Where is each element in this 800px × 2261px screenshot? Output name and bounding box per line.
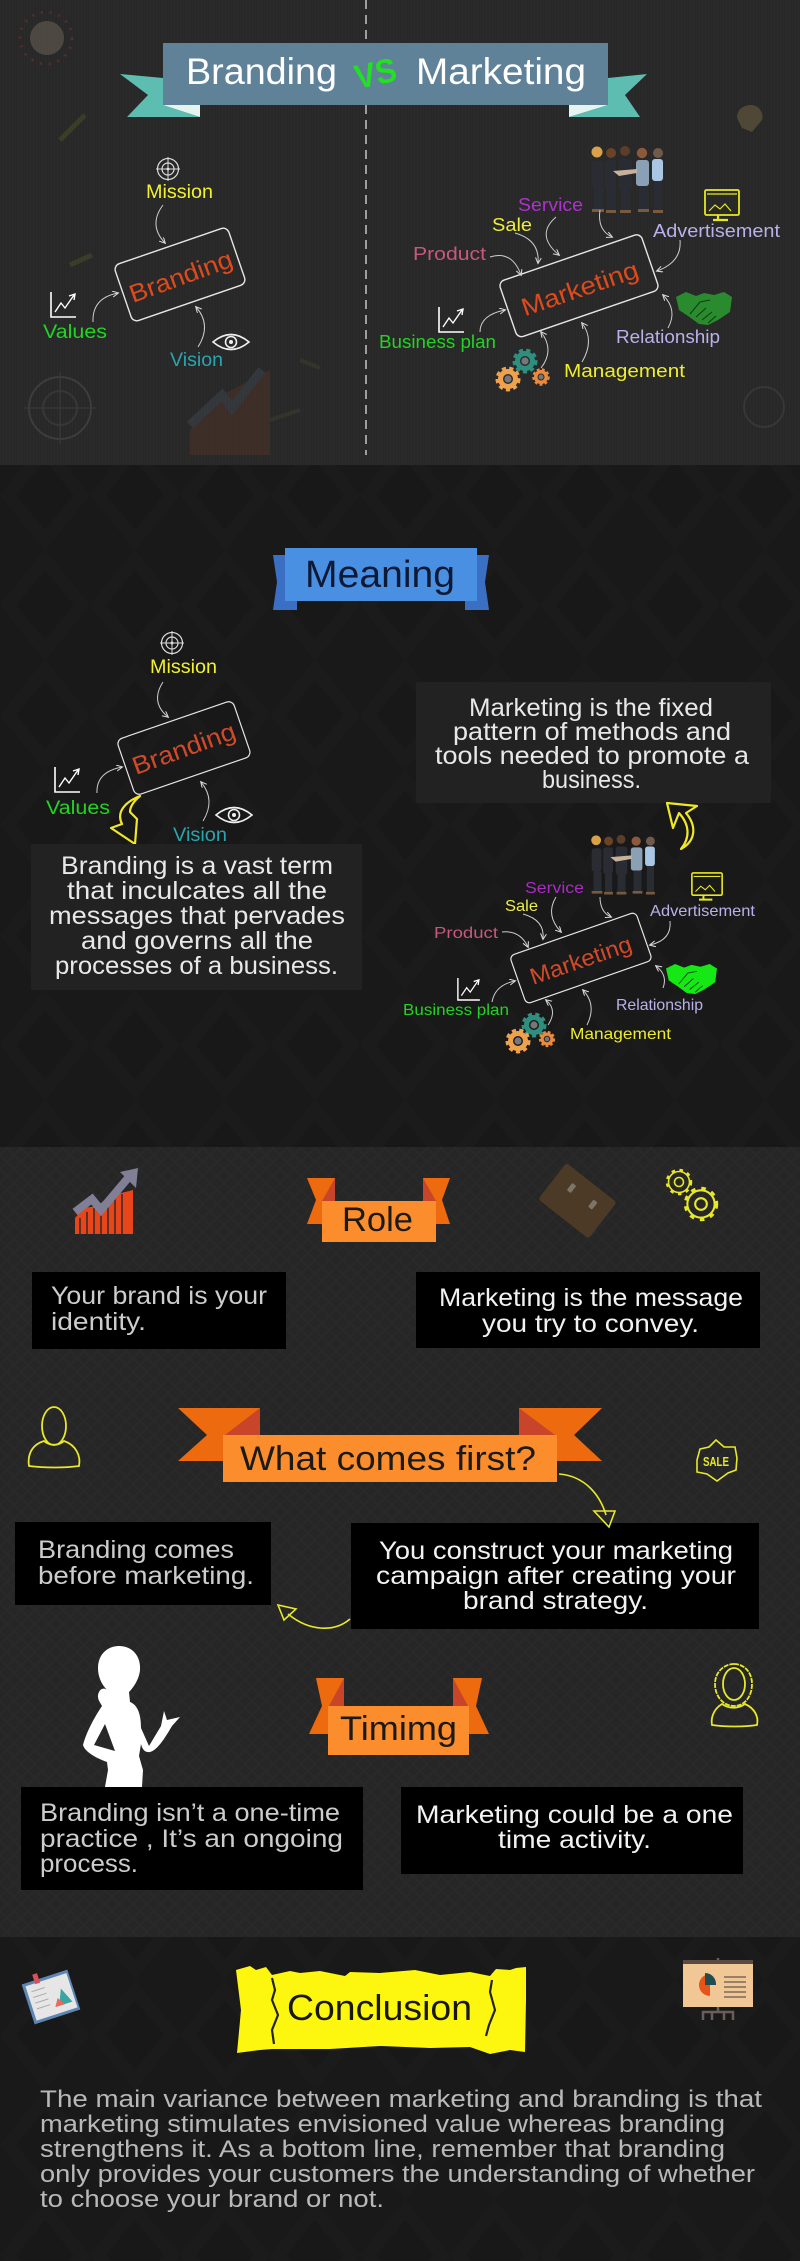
text panel: marketing after: campaign after creating your <box>376 1562 736 1590</box>
icon: gears outline <box>667 1170 717 1220</box>
Marketing box <box>510 912 652 1004</box>
Vision: Vision <box>173 825 227 846</box>
text panel: role branding: Your brand is your <box>51 1282 267 1310</box>
Marketing label: Marketing <box>518 256 642 322</box>
Management: Management <box>570 1026 672 1043</box>
conclusion text: The main variance between marketing and branding is that <box>40 2086 762 2113</box>
icon: presentation board <box>683 1958 753 2020</box>
conclusion text: only provides your customers the understanding of whether <box>40 2161 755 2188</box>
heading ribbon: Meaning <box>273 548 489 610</box>
Business plan: Business plan <box>403 1002 509 1019</box>
conclusion text <box>40 2086 762 2213</box>
icon: monitor <box>692 873 722 900</box>
conclusion text: to choose your brand or not. <box>40 2186 384 2213</box>
Relationship: Relationship <box>616 327 720 347</box>
Mission: Mission <box>146 182 213 203</box>
text panel: branding first: Branding comes <box>38 1536 234 1564</box>
arrow: yellow down to branding text <box>111 796 140 844</box>
section: comparison background <box>0 1147 800 1937</box>
text panel: branding meaning: and governs all the <box>81 927 313 955</box>
section: conclusion background <box>0 1937 800 2261</box>
icon: notebook <box>20 1964 80 2024</box>
text panel: marketing meaning: pattern of methods and <box>453 718 731 746</box>
text panel: timing marketing: Marketing could be a one <box>416 1801 733 1829</box>
diagram: Branding (top) <box>43 157 249 371</box>
icon: briefcase <box>538 1163 617 1239</box>
diagram: Marketing (top) <box>379 146 780 390</box>
icon: gears <box>508 1014 554 1052</box>
text panel: role marketing: Marketing is the message <box>439 1284 743 1312</box>
icon: target <box>156 157 180 181</box>
Service: Service <box>525 880 584 897</box>
Mission: Mission <box>150 657 217 678</box>
conclusion text: strengthens it. As a bottom line, remember that branding <box>40 2136 725 2163</box>
icon: monitor <box>705 190 739 220</box>
icon: eye <box>216 808 252 822</box>
text panel: branding first: before marketing. <box>38 1562 254 1590</box>
Branding box <box>114 227 246 322</box>
text panel: marketing meaning: tools needed to promote a <box>435 742 749 770</box>
title ribbon <box>120 43 647 117</box>
text panel: timing marketing: time activity. <box>498 1826 651 1854</box>
Branding box <box>116 700 252 796</box>
arrow: yellow up to marketing text <box>667 803 697 849</box>
text panel: branding meaning: that inculcates all the <box>67 877 327 905</box>
connector arrows <box>93 205 205 347</box>
text panel: branding meaning <box>31 844 362 990</box>
heading text: Meaning <box>305 554 455 596</box>
section: title background <box>0 0 800 465</box>
Service: Service <box>518 195 583 215</box>
Advertisement: Advertisement <box>653 221 780 241</box>
heading text: What comes first? <box>240 1440 536 1478</box>
title: Branding: Branding <box>186 51 337 92</box>
connector arrows <box>480 210 680 368</box>
icon: sale badge: SALE <box>703 1454 729 1469</box>
Marketing label: Marketing <box>526 931 635 990</box>
Management: Management <box>564 361 685 381</box>
text panel: marketing after <box>351 1523 759 1629</box>
Advertisement: Advertisement <box>650 903 756 920</box>
icon: sale badge <box>697 1440 737 1481</box>
text panel: role marketing <box>416 1272 760 1348</box>
icon: target <box>160 631 184 655</box>
arrow: to branding first <box>278 1605 350 1628</box>
heading ribbon: Timimg <box>309 1678 489 1755</box>
Values: Values <box>43 322 107 343</box>
heading text: Timimg <box>340 1710 457 1748</box>
text panel: branding meaning: Branding is a vast term <box>61 852 333 880</box>
text panel: marketing meaning: Marketing is the fixed <box>469 694 713 722</box>
conclusion text: marketing stimulates envisioned value whereas branding <box>40 2111 725 2138</box>
Sale: Sale <box>505 898 538 915</box>
icon: woman silhouette <box>83 1646 180 1787</box>
text panel: timing branding: process. <box>40 1850 138 1878</box>
icon: business team <box>591 835 655 895</box>
heading scroll: Conclusion <box>236 1966 526 2054</box>
text panel: timing marketing <box>401 1787 743 1874</box>
icon: person outline <box>29 1407 79 1468</box>
text panel: timing branding: Branding isn’t a one-time <box>40 1799 340 1827</box>
icon: gears <box>498 350 548 390</box>
title: vs: VS <box>351 51 400 97</box>
text panel: role branding <box>32 1272 286 1349</box>
text panel: marketing after: brand strategy. <box>463 1587 648 1615</box>
icon: handshake <box>676 292 732 325</box>
faint background decorations <box>20 12 784 455</box>
text panel: role marketing: you try to convey. <box>482 1310 699 1338</box>
title: Marketing: Marketing <box>416 51 586 92</box>
Business plan: Business plan <box>379 332 496 352</box>
text panel: marketing meaning: business. <box>542 766 641 794</box>
heading ribbon: Role <box>307 1178 450 1242</box>
diagram: Marketing (meaning) <box>403 835 756 1052</box>
text panel: marketing meaning <box>416 682 771 803</box>
Branding label: Branding <box>125 245 237 309</box>
text panel: timing branding: practice , It’s an ongoing <box>40 1825 343 1853</box>
section: meaning background <box>0 465 800 1147</box>
text panel: branding meaning: messages that pervades <box>49 902 345 930</box>
text panel: branding meaning: processes of a business. <box>55 952 338 980</box>
icon: person with badge outline <box>712 1664 757 1726</box>
Values: Values <box>46 798 110 819</box>
icon: chart <box>51 292 76 317</box>
text panel: marketing after: You construct your marketing <box>379 1537 733 1565</box>
Product: Product <box>413 244 486 264</box>
icon: chart <box>458 978 480 1000</box>
Relationship: Relationship <box>616 997 703 1014</box>
icon: chart <box>439 307 464 332</box>
connector arrows <box>97 682 209 821</box>
text panel: role branding: identity. <box>51 1308 146 1336</box>
Sale: Sale <box>492 215 532 235</box>
heading ribbon: What comes first <box>178 1408 602 1482</box>
icon: chart <box>55 767 80 792</box>
connector arrows <box>492 897 670 1025</box>
icon: eye <box>213 334 249 350</box>
heading text: Role <box>342 1201 413 1239</box>
icon: business team <box>592 146 663 213</box>
heading text: Conclusion <box>287 1987 472 2028</box>
Marketing box <box>498 233 660 338</box>
icon: growth chart <box>75 1168 138 1234</box>
arrow: to marketing campaign <box>559 1474 615 1527</box>
Vision: Vision <box>170 350 223 371</box>
Branding label: Branding <box>128 717 240 781</box>
diagram: Branding (meaning) <box>46 631 252 846</box>
text panel: branding first <box>15 1522 271 1605</box>
text panel: timing branding <box>21 1787 363 1890</box>
icon: handshake <box>666 964 717 994</box>
Product: Product <box>434 925 499 942</box>
center dashed divider <box>365 0 367 455</box>
